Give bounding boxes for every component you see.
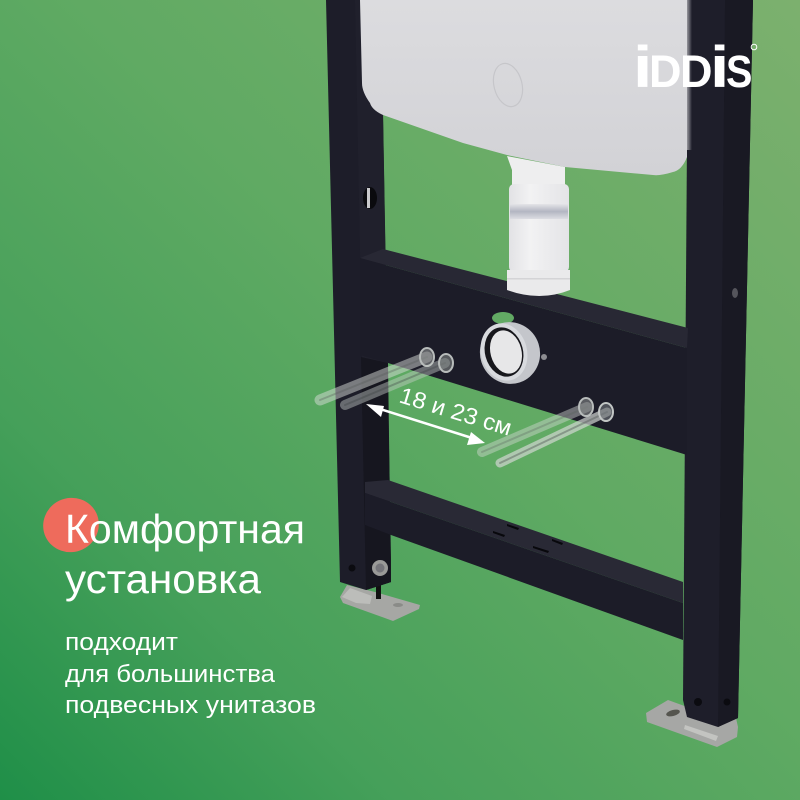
left post — [326, 0, 391, 590]
upper crossbar — [360, 249, 688, 455]
title: установка — [65, 556, 261, 602]
right post — [683, 0, 753, 727]
dimension arrow — [366, 404, 485, 445]
lower crossbar slots — [493, 524, 563, 553]
description — [65, 629, 316, 719]
brand logo: D — [649, 46, 682, 97]
embossed tank logo — [489, 60, 527, 110]
lower crossbar — [365, 480, 683, 640]
description: подвесных унитазов — [65, 692, 316, 719]
rod 3 — [482, 398, 593, 452]
right foot plate — [646, 700, 738, 747]
description: для большинства — [65, 661, 276, 688]
description: подходит — [65, 629, 178, 656]
brand logo: S — [726, 47, 752, 97]
rod 2 — [345, 354, 453, 405]
glass mounting rods — [320, 348, 613, 463]
post holes — [348, 187, 738, 706]
rod 1 — [320, 348, 434, 400]
left foot plate — [340, 585, 420, 621]
brand logo: D — [680, 46, 712, 97]
cistern tank — [360, 0, 692, 175]
brand logo: i — [710, 34, 729, 100]
title — [65, 506, 305, 602]
accent blob — [34, 489, 108, 561]
dimension label: 18 и 23 см — [397, 382, 515, 441]
brand logo — [633, 34, 757, 100]
title: Комфортная — [65, 506, 305, 552]
central drain fitting — [472, 312, 548, 392]
brand logo: i — [633, 34, 652, 100]
installation frame — [326, 0, 753, 727]
rod 4 — [500, 403, 613, 463]
drain pipe — [507, 156, 570, 296]
